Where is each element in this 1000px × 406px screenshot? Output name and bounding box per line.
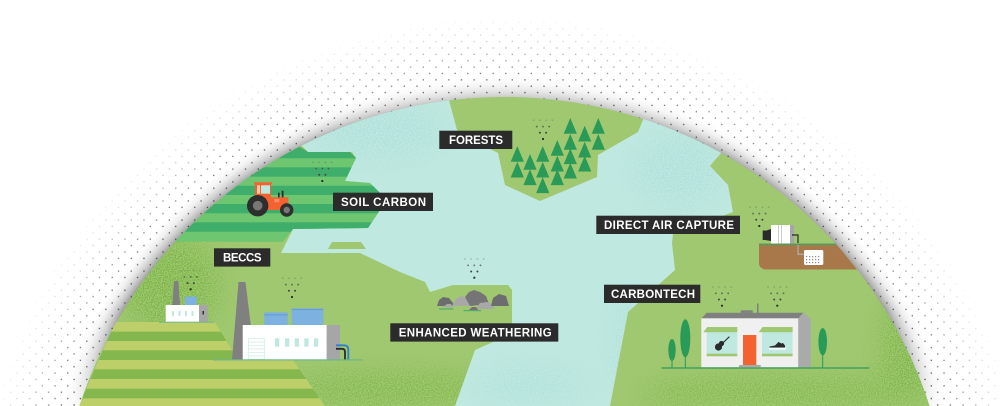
label: direct air capture — [596, 216, 740, 234]
label: soil carbon — [333, 193, 433, 211]
direct air capture soil block — [759, 245, 857, 270]
icon: guitar — [715, 336, 730, 351]
globe drop shadow — [57, 76, 952, 406]
label: soil carbon: SOIL CARBON — [341, 197, 426, 209]
icon: small beccs factory — [159, 281, 214, 323]
land grain shading — [120, 235, 940, 406]
carbon dots: carbontech left — [712, 286, 732, 307]
label: forests — [439, 131, 512, 149]
carbon dots: forests — [533, 119, 553, 140]
carbon dots: carbontech right — [767, 286, 788, 307]
beccs striped field — [70, 322, 340, 406]
icon: shoe — [769, 342, 786, 350]
carbon dots: enhanced weathering — [464, 258, 484, 279]
soil carbon striped field — [175, 146, 380, 242]
label: enhanced weathering — [390, 323, 558, 342]
icon: cypress trees — [668, 319, 827, 368]
label: forests: FORESTS — [449, 135, 503, 147]
label: beccs — [214, 248, 270, 267]
water grain shading — [310, 98, 730, 405]
carbon dots: large factory — [282, 277, 302, 298]
island — [328, 242, 366, 249]
label: carbontech — [604, 285, 700, 303]
icon: direct air capture machine — [759, 225, 836, 265]
icon: forest trees — [511, 118, 605, 193]
label: enhanced weathering: ENHANCED WEATHERING — [399, 328, 552, 340]
icon: tractor — [247, 182, 293, 217]
land base — [79, 97, 930, 406]
globe — [70, 90, 940, 406]
carbon dots: small factory — [180, 270, 201, 290]
water — [281, 90, 733, 406]
icon: weathering rocks — [437, 290, 509, 311]
carbon dots: direct air capture — [749, 206, 770, 227]
icon: carbontech shop — [662, 304, 869, 369]
carbon dots: soil carbon — [312, 161, 332, 182]
icon: large beccs factory — [213, 282, 363, 360]
label: direct air capture: DIRECT AIR CAPTURE — [604, 220, 734, 232]
label: beccs: BECCS — [223, 253, 262, 265]
label: carbontech: CARBONTECH — [611, 289, 695, 301]
